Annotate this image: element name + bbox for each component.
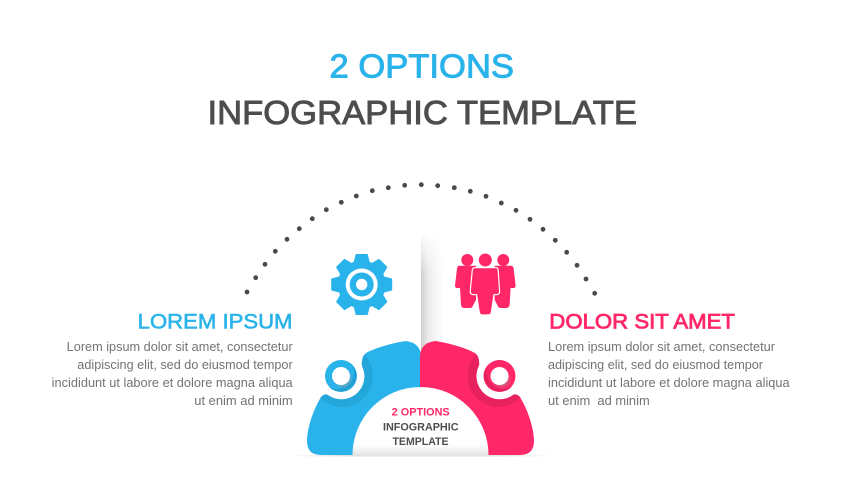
center label: INFOGRAPHIC: [383, 421, 459, 433]
fold shadow: [421, 232, 443, 357]
text block: right: adipiscing elit, sed do eiusmod tempor: [548, 358, 763, 372]
heading: lorem ipsum: LOREM IPSUM: [138, 308, 292, 333]
baseline shadow: [285, 455, 556, 456]
icon: people: [455, 254, 516, 315]
text block: left: ut enim ad minim: [194, 394, 293, 408]
panel: blue half: [307, 341, 421, 455]
text block: right: [548, 340, 790, 408]
panel: pink half: [420, 341, 534, 455]
icon: pink ring: [484, 360, 516, 392]
center label: TEMPLATE: [392, 436, 448, 448]
text block: left: Lorem ipsum dolor sit amet, consectetur: [67, 340, 293, 354]
text block: left: [52, 340, 293, 408]
icon: gear: [331, 254, 392, 315]
icon: blue ring: [325, 360, 357, 392]
title: INFOGRAPHIC TEMPLATE: [208, 94, 637, 131]
text block: left: incididunt ut labore et dolore magna aliqua: [52, 376, 293, 390]
title: 2 OPTIONS: [330, 48, 514, 85]
center label: [383, 406, 459, 448]
title: [208, 48, 637, 131]
text block: left: adipiscing elit, sed do eiusmod tempor: [77, 358, 293, 372]
text block: right: Lorem ipsum dolor sit amet, consectetur: [548, 340, 775, 354]
text block: right: ut enim ad minim: [548, 394, 650, 408]
center semicircle: [352, 387, 488, 455]
center label: 2 OPTIONS: [392, 406, 450, 418]
dotted arc: [245, 182, 597, 296]
text block: right: incididunt ut labore et dolore magna aliqua: [548, 376, 790, 390]
heading: dolor sit amet: DOLOR SIT AMET: [549, 308, 735, 333]
